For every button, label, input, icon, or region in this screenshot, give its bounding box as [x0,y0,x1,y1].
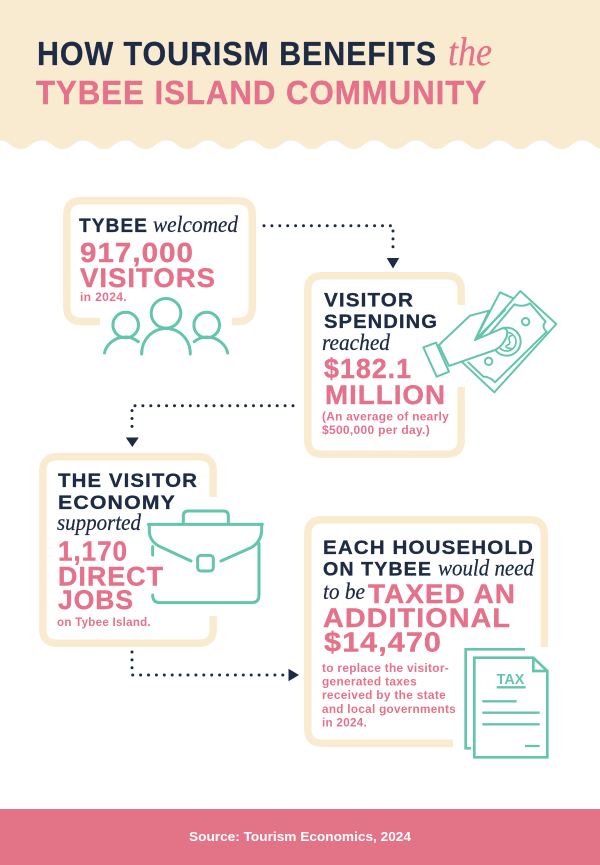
title: HOW TOURISM BENEFITS [37,35,437,72]
heading text: supported [57,510,141,535]
card outline [43,457,213,643]
footer bar [0,809,600,865]
heading text: 1,170 [58,536,128,567]
body text: and local governments [322,702,456,716]
heading text: ECONOMY [58,493,176,514]
icon: tax document: TAX [497,672,525,688]
heading text: $500,000 per day.) [322,423,430,437]
heading text: JOBS [58,585,134,615]
body text: received by the state [322,688,446,702]
heading text [57,471,198,629]
heading text: TYBEE [79,216,148,237]
card outline [308,520,544,743]
body text: in 2024. [322,716,367,730]
heading text: MILLION [325,380,446,410]
heading text: THE VISITOR [58,471,198,492]
heading text: $14,470 [324,627,442,658]
heading text: SPENDING [324,312,438,333]
panel: jobs [43,457,262,643]
heading text: reached [322,330,390,355]
heading text: $182.1 [324,353,412,384]
arrow: jobs to taxes [132,652,299,681]
header banner with scalloped edge [0,0,600,149]
heading text [79,212,238,304]
card outline [67,201,252,322]
icon: briefcase [148,511,262,603]
icon: people [104,298,228,354]
heading text: would need [438,556,534,581]
heading text: VISITORS [80,263,216,293]
icon: tax document [466,649,547,757]
card outline [308,276,461,454]
body text: generated taxes [322,675,417,689]
icon: hand holding money [423,291,556,392]
heading text: TAXED AN [368,579,516,609]
heading text: ON TYBEE [323,560,432,581]
title: TYBEE ISLAND COMMUNITY [36,74,487,111]
panel: spending [308,276,556,454]
source line: Source: Tourism Economics, 2024 [189,829,412,844]
title: the [448,29,492,74]
heading text: ADDITIONAL [323,603,511,633]
heading text: on Tybee Island. [57,615,151,629]
title [36,29,492,111]
panel: visitors [67,201,252,354]
heading text: 917,000 [80,237,194,268]
heading text [322,291,449,437]
heading text [323,538,534,658]
heading text: in 2024. [80,290,127,304]
panel: taxes [308,520,547,757]
heading text: EACH HOUSEHOLD [323,538,534,559]
heading text: DIRECT [58,562,164,592]
arrow: spending to jobs [126,406,293,447]
arrow: visitors to spending [264,226,399,268]
heading text: to be [323,579,365,604]
heading text: VISITOR [324,291,414,312]
heading text: (An average of nearly [322,410,449,424]
body text [322,661,456,730]
body text: to replace the visitor- [322,661,449,675]
heading text: welcomed [153,212,238,237]
